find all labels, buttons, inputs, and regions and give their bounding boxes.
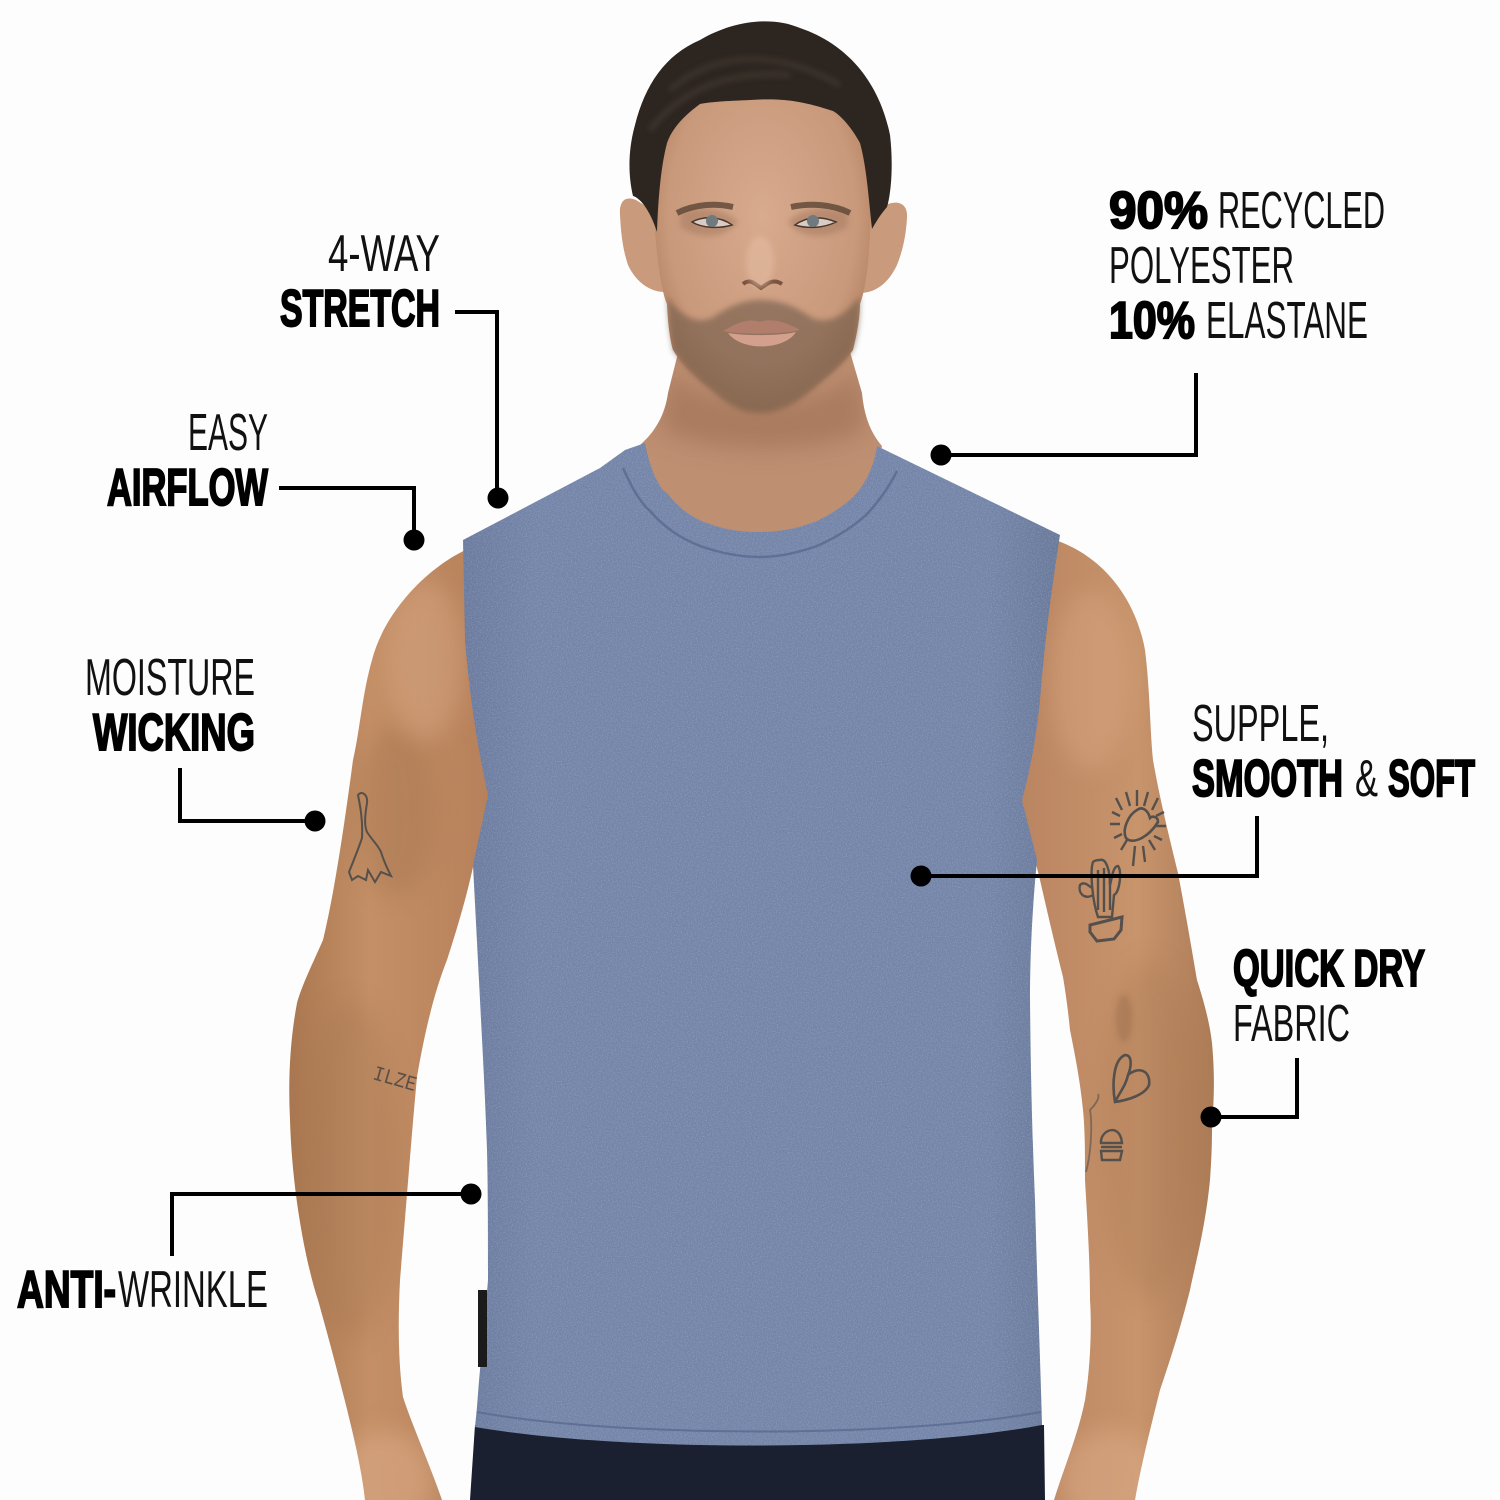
marker dot (460, 1184, 482, 1204)
tattoo: dinosaur (349, 793, 391, 882)
callout: easy airflow (107, 404, 424, 550)
marker dot (930, 444, 952, 466)
tattoo: drumstick (1086, 1094, 1098, 1172)
label: anti-wrinkle: WRINKLE (118, 1261, 268, 1319)
leader line (921, 816, 1257, 876)
label: easy airflow: EASY (188, 404, 268, 462)
nose highlight (746, 236, 774, 288)
label: quick dry fabric (1233, 940, 1425, 1053)
lips (723, 320, 800, 334)
left arm (285, 540, 495, 1500)
marker dot (910, 866, 932, 886)
tattoos (349, 790, 1166, 1172)
label: 4-way stretch: STRETCH (280, 280, 440, 338)
beard (667, 296, 860, 413)
leader line (279, 488, 414, 540)
model photo illustration (285, 21, 1220, 1500)
marker dot (404, 530, 424, 550)
marker dot (304, 810, 326, 832)
label: supple, smooth and soft (1192, 695, 1475, 808)
eye socket shadows (680, 208, 848, 236)
ears (620, 199, 907, 293)
face (654, 74, 871, 413)
eyes (692, 218, 836, 227)
callout: supple, smooth and soft (910, 695, 1475, 886)
hair (629, 21, 892, 232)
tattoo: sun with hat (1110, 790, 1166, 866)
label: composition: 90% (1109, 182, 1208, 240)
hair highlights (650, 59, 840, 130)
leader line (1211, 1058, 1297, 1117)
label: easy airflow (107, 404, 269, 517)
label: moisture wicking: WICKING (93, 704, 255, 762)
label: moisture wicking: MOISTURE (85, 649, 255, 707)
label: moisture wicking (85, 649, 255, 762)
jeans (470, 1425, 1045, 1500)
tattoo: name: ILZE (370, 1064, 419, 1098)
neck (640, 354, 882, 532)
right arm (1015, 530, 1220, 1500)
label: composition: ELASTANE (1206, 292, 1368, 350)
label: composition: POLYESTER (1109, 237, 1294, 295)
eyebrows (677, 205, 850, 213)
callout: anti-wrinkle (17, 1184, 482, 1319)
label: 4-way stretch: 4-WAY (328, 225, 440, 283)
callout: quick dry fabric (1200, 940, 1425, 1128)
lower lip (728, 332, 796, 346)
label: anti-wrinkle (17, 1261, 268, 1319)
leader line (172, 1194, 471, 1256)
leader line (455, 312, 497, 498)
irises (706, 215, 718, 227)
tattoo: burger (1101, 1130, 1122, 1160)
tattoo: broken heart (1114, 1055, 1149, 1102)
hem seam (477, 1412, 1041, 1432)
label: easy airflow: AIRFLOW (107, 459, 269, 517)
label: quick dry fabric: FABRIC (1233, 995, 1350, 1053)
callout: 4-way stretch (280, 225, 508, 508)
label: supple, smooth and soft: SMOOTH (1192, 750, 1343, 808)
right iris (807, 215, 819, 227)
label: composition: 10% (1109, 292, 1195, 350)
nose (743, 281, 782, 288)
label: composition (1109, 182, 1385, 350)
collar seam (623, 468, 897, 557)
callout: 90% recycled polyester 10% elastane (930, 182, 1385, 466)
label: supple, smooth and soft: & (1355, 750, 1378, 808)
shirt heather texture (463, 443, 1060, 1446)
label: supple, smooth and soft: SUPPLE, (1192, 695, 1329, 753)
shirt tag (478, 1290, 487, 1367)
callout: moisture wicking (85, 649, 326, 832)
label: anti-wrinkle: ANTI- (17, 1261, 116, 1319)
leader line (180, 768, 315, 821)
tattoo: cactus (1080, 860, 1122, 941)
marker dot (1200, 1106, 1222, 1128)
label: 4-way stretch (280, 225, 440, 338)
label: composition: RECYCLED (1218, 182, 1385, 240)
marker dot (488, 488, 508, 508)
leader line (941, 373, 1196, 455)
shirt (463, 443, 1060, 1446)
